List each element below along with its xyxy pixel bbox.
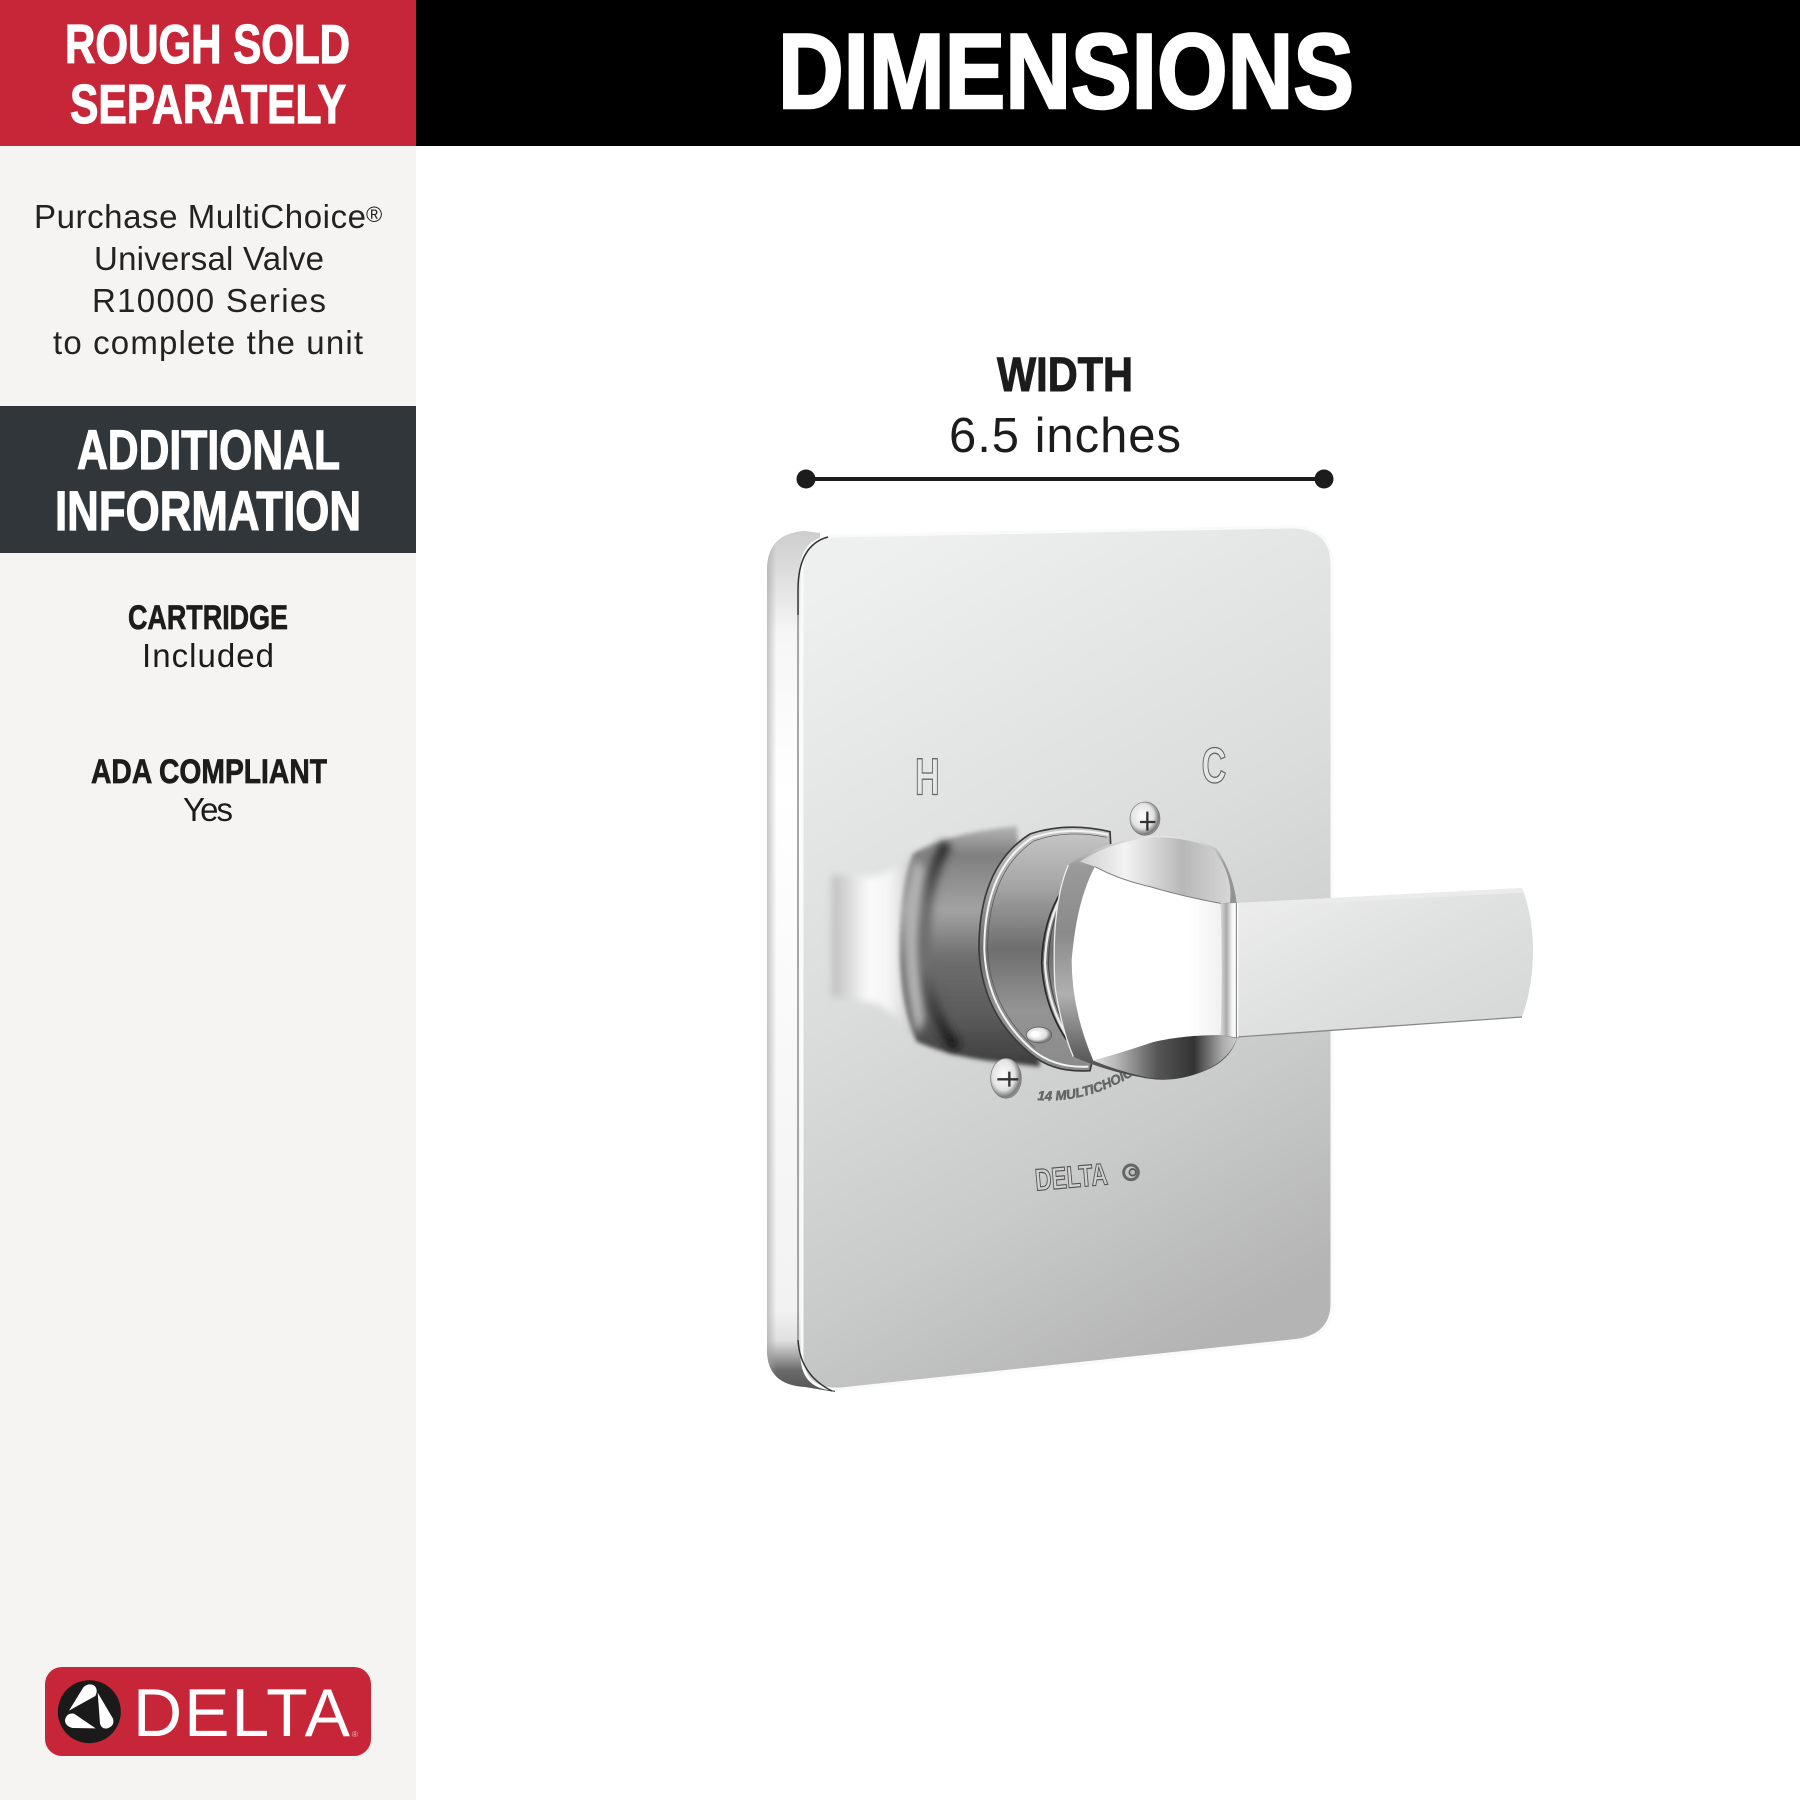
handle junction strip (1221, 903, 1237, 1038)
purchase note text: to complete the unit (53, 324, 363, 361)
spec: cartridge: CARTRIDGE (128, 599, 288, 637)
width label (949, 349, 1181, 463)
purchase note text: Purchase MultiChoice (34, 198, 366, 235)
purchase note text: ® (366, 202, 382, 227)
delta logo (45, 1667, 371, 1756)
spec: cartridge (128, 599, 288, 674)
small set screw (1026, 1027, 1052, 1043)
dark banner: additional information: ADDITIONAL (77, 418, 340, 481)
red banner: rough sold separately: SEPARATELY (70, 73, 346, 135)
engraved delta mark: DELTA (1034, 1157, 1109, 1198)
inner ring sliver (1042, 883, 1070, 1040)
header bar: dimensions (416, 0, 1800, 146)
plate side edge (767, 531, 835, 1392)
red banner: rough sold separately (0, 0, 416, 146)
engraved multichoice text (1037, 1072, 1132, 1101)
width dimension arrow (796, 470, 1334, 488)
spec: cartridge: Included (142, 637, 274, 674)
spec: ada compliant (91, 753, 327, 828)
chrome ring (979, 827, 1117, 1071)
purchase note text (34, 198, 382, 361)
width label: WIDTH (997, 349, 1133, 402)
delta logo: ® (352, 1730, 358, 1739)
blurred rear collar (900, 826, 1040, 1067)
delta logo: DELTA (133, 1675, 351, 1751)
red banner: rough sold separately: ROUGH SOLD (65, 13, 350, 75)
top screw (1130, 802, 1160, 835)
blurred escutcheon base (832, 853, 915, 1040)
dark banner: additional information (0, 406, 416, 553)
cap top highlight (1080, 837, 1231, 903)
lever (1237, 888, 1533, 1037)
spec: ada compliant: ADA COMPLIANT (91, 753, 327, 791)
engraved multichoice text: 14 MULTICHOICE (1037, 1072, 1132, 1101)
width label: 6.5 inches (949, 409, 1181, 463)
cap white face (1072, 867, 1223, 1061)
title: DIMENSIONS (778, 11, 1354, 131)
spec: ada compliant: Yes (183, 791, 233, 828)
product: valve trim plate and handle (767, 528, 1533, 1392)
engraved H: H (915, 749, 940, 807)
handle cap (1054, 836, 1237, 1080)
engraved C: C (1202, 737, 1226, 793)
purchase note text: Universal Valve (94, 240, 324, 277)
sidebar background (0, 0, 416, 1800)
dark banner: additional information: INFORMATION (55, 479, 361, 542)
purchase note text: R10000 Series (92, 282, 326, 319)
plate front face (802, 527, 1332, 1389)
bottom screw (991, 1058, 1021, 1098)
cap bottom shadow (1093, 1035, 1237, 1079)
